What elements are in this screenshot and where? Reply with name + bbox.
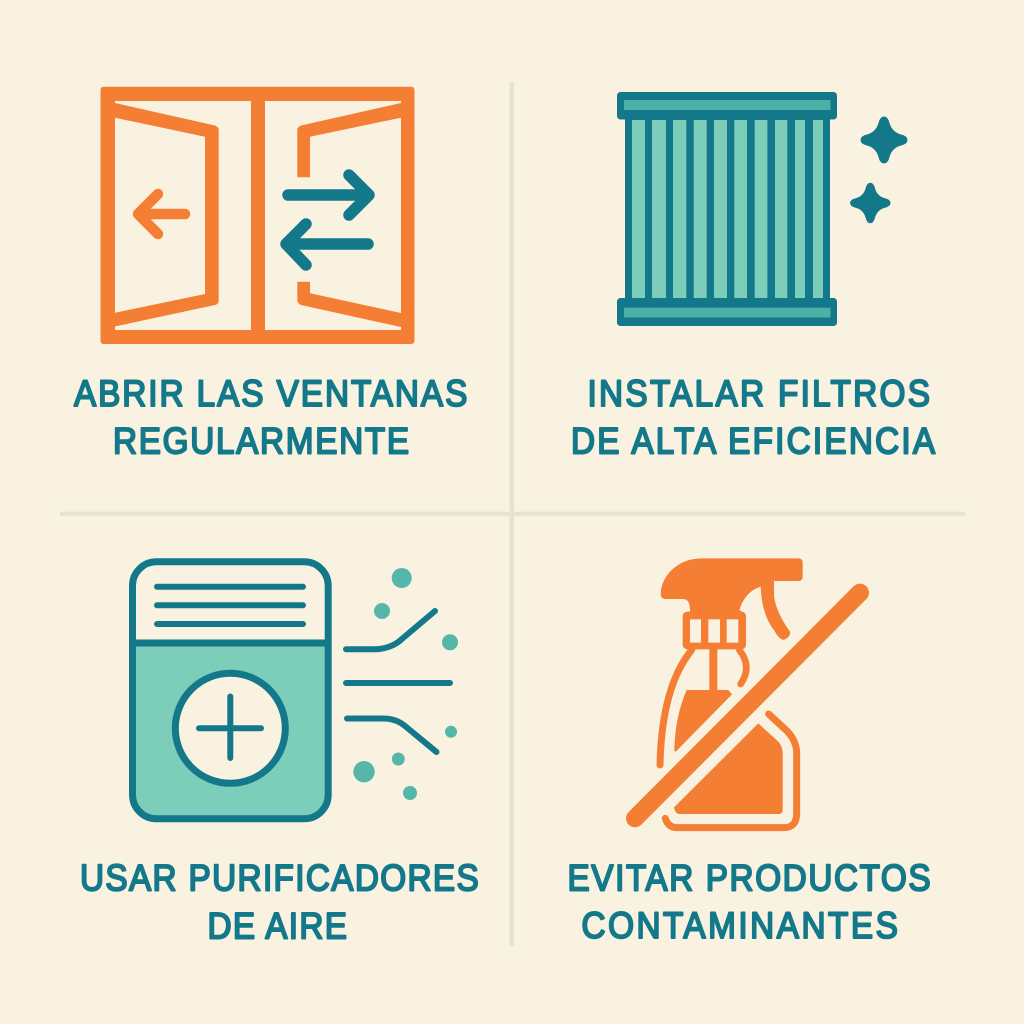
right window sash bottom [297, 282, 401, 327]
bottle right outline [665, 714, 797, 828]
label: avoid polluting products [568, 858, 931, 946]
panel: high efficiency filters [571, 92, 936, 462]
lower liquid [674, 723, 783, 814]
spray tube [709, 649, 717, 692]
label: avoid polluting products: EVITAR PRODUCTOS [568, 858, 931, 899]
left window sash [115, 103, 219, 326]
purifier body [132, 562, 329, 819]
spray nozzle collar [683, 612, 746, 649]
label: air purifiers [80, 858, 479, 947]
top filter cap [617, 92, 837, 120]
label: air purifiers: USAR PURIFICADORES [80, 858, 479, 899]
arrow: teal right [288, 175, 369, 215]
label: open windows: REGULARMENTE [113, 421, 409, 462]
right window sash top [297, 103, 401, 177]
icon: crossed out spray bottle [635, 558, 860, 828]
label: high efficiency filters [571, 373, 936, 462]
icon: air purifier [132, 562, 458, 819]
panel: air purifiers [80, 562, 479, 947]
panel: open windows [74, 87, 467, 462]
trigger curve [739, 650, 746, 684]
arrow: orange left [138, 194, 185, 234]
purifier plus dial [175, 673, 285, 783]
prohibition slash [635, 593, 860, 818]
window frame [100, 87, 414, 344]
purifier vent lines [157, 587, 303, 624]
label: open windows [74, 373, 467, 462]
filter body [625, 115, 830, 303]
icon: open window [100, 87, 414, 344]
label: high efficiency filters: INSTALAR FILTROS [588, 373, 930, 414]
arrow: teal left [286, 224, 368, 265]
bottom filter cap [617, 298, 837, 326]
icon: small sparkle [850, 183, 891, 223]
label: high efficiency filters: DE ALTA EFICIENCIA [571, 421, 936, 462]
label: avoid polluting products: CONTAMINANTES [582, 905, 898, 946]
icon: large sparkle [860, 116, 908, 164]
filter pleats [632, 120, 823, 298]
air flow lines [346, 611, 450, 752]
bottle left outline [660, 650, 692, 765]
clean air particles [353, 568, 458, 800]
spray head [661, 558, 803, 640]
label: open windows: ABRIR LAS VENTANAS [74, 373, 467, 414]
upper liquid [674, 690, 732, 751]
label: air purifiers: DE AIRE [208, 906, 347, 947]
panel: avoid polluting products [568, 558, 931, 946]
icon: air filter [617, 92, 908, 326]
